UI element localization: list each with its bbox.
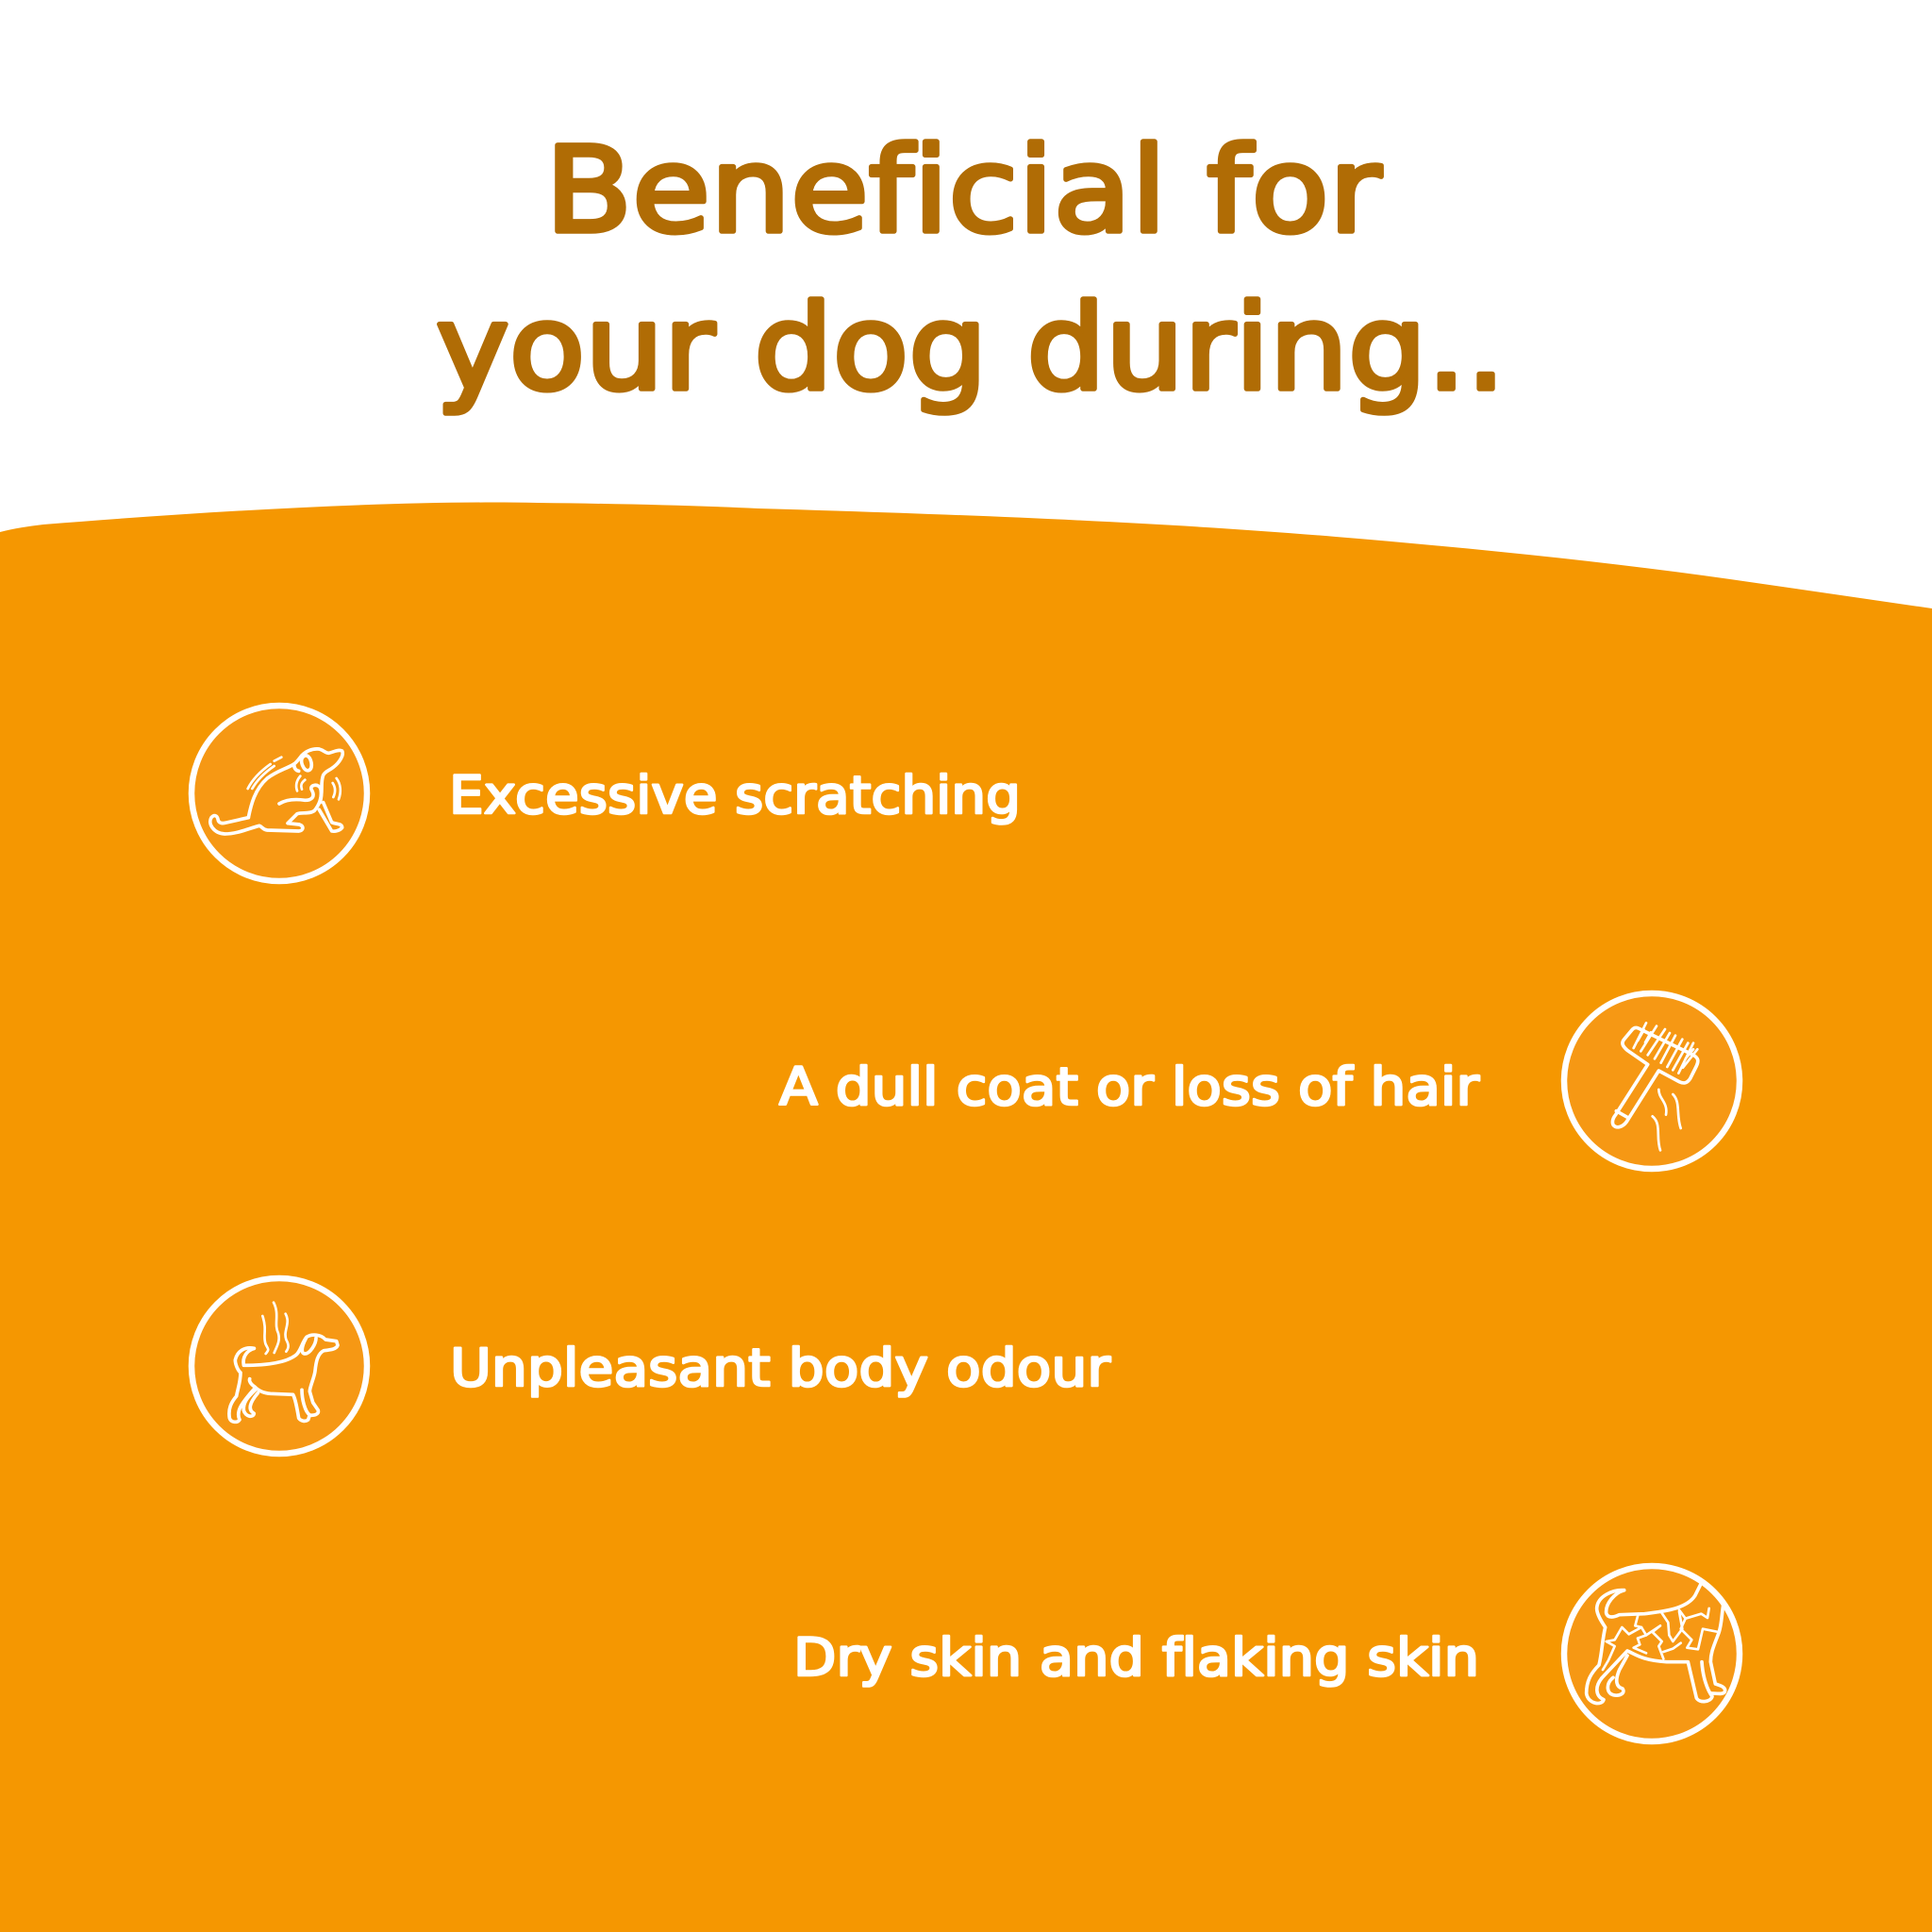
title [436, 123, 1506, 417]
label: body odour: Unpleasant body odour [450, 1338, 1110, 1398]
row 4: dry skin [793, 1566, 1740, 1741]
icon: dog with cracked skin [1564, 1566, 1740, 1741]
label: excessive scratching: Excessive scratching [449, 765, 1021, 825]
icon: scratching dog [192, 706, 367, 881]
label: dry skin: Dry skin and flaking skin [793, 1627, 1479, 1688]
row 1: excessive scratching [192, 706, 1021, 881]
icon: grooming comb [1564, 993, 1740, 1169]
label: dull coat: A dull coat or loss of hair [779, 1057, 1479, 1117]
row 2: dull coat [779, 993, 1740, 1169]
orange wave panel [0, 503, 1932, 1932]
row 3: body odour [192, 1278, 1110, 1454]
icon: smelly dog [192, 1278, 367, 1454]
title: your dog during.. [436, 280, 1506, 417]
title: Beneficial for [545, 123, 1382, 259]
